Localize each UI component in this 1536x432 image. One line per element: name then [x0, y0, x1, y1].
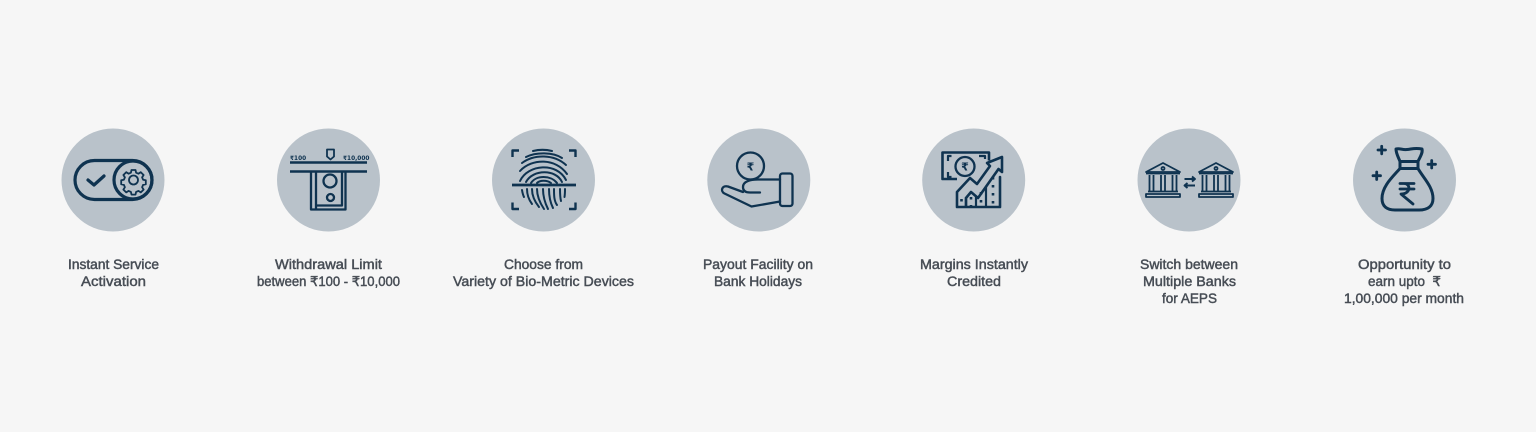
icon: cash withdrawal slot: [277, 128, 380, 232]
label: switch between banks: for AEPS: [1162, 291, 1217, 306]
label: switch between banks: Switch between: [1140, 257, 1238, 272]
item: margins instantly credited: [920, 128, 1028, 289]
label: instant service activation: Instant Service: [68, 257, 159, 272]
icon: banknote with rising chart: ₹: [961, 160, 969, 174]
icon: banknote with rising chart: [922, 128, 1025, 232]
icon: cash withdrawal slot: ₹10,000: [343, 155, 369, 162]
label: margins instantly credited: Credited: [947, 274, 1001, 289]
label: earning opportunity: 1,00,000 per month: [1344, 291, 1464, 306]
label: margins instantly credited: Margins Instantly: [920, 257, 1028, 272]
item: earning opportunity: [1344, 128, 1464, 306]
item: withdrawal limit: [257, 128, 400, 289]
label: payout on bank holidays: Payout Facility on: [703, 257, 813, 272]
label: earning opportunity: Opportunity to: [1358, 257, 1451, 272]
label: payout on bank holidays: [703, 257, 813, 289]
icon: cash withdrawal slot: ₹100: [290, 155, 306, 162]
label: margins instantly credited: [920, 257, 1028, 289]
label: instant service activation: [68, 257, 159, 289]
label: earning opportunity: [1344, 257, 1464, 306]
label: instant service activation: Activation: [81, 274, 146, 289]
label: withdrawal limit: [257, 257, 400, 289]
label: switch between banks: [1140, 257, 1238, 306]
icon: hand holding coin: [707, 128, 810, 232]
icon: toggle with check and gear: [62, 128, 164, 232]
label: payout on bank holidays: Bank Holidays: [714, 274, 802, 289]
item: payout on bank holidays: [703, 128, 813, 289]
item: instant service activation: [62, 128, 164, 289]
label: biometric devices: Variety of Bio-Metric Devices: [453, 274, 634, 289]
item: switch between banks: [1138, 128, 1240, 306]
icon: two banks with exchange arrows: [1138, 128, 1240, 232]
label: withdrawal limit: between ₹100 - ₹10,000: [257, 274, 400, 289]
icon: money bag: [1353, 128, 1456, 232]
label: biometric devices: [453, 257, 634, 289]
label: earning opportunity: earn upto ₹: [1368, 274, 1441, 289]
label: switch between banks: Multiple Banks: [1143, 274, 1236, 289]
label: biometric devices: Choose from: [504, 257, 583, 272]
label: withdrawal limit: Withdrawal Limit: [275, 257, 382, 272]
item: biometric devices: [453, 128, 634, 289]
icon: fingerprint scanner: [492, 128, 595, 232]
icon: hand holding coin: ₹: [747, 160, 755, 174]
